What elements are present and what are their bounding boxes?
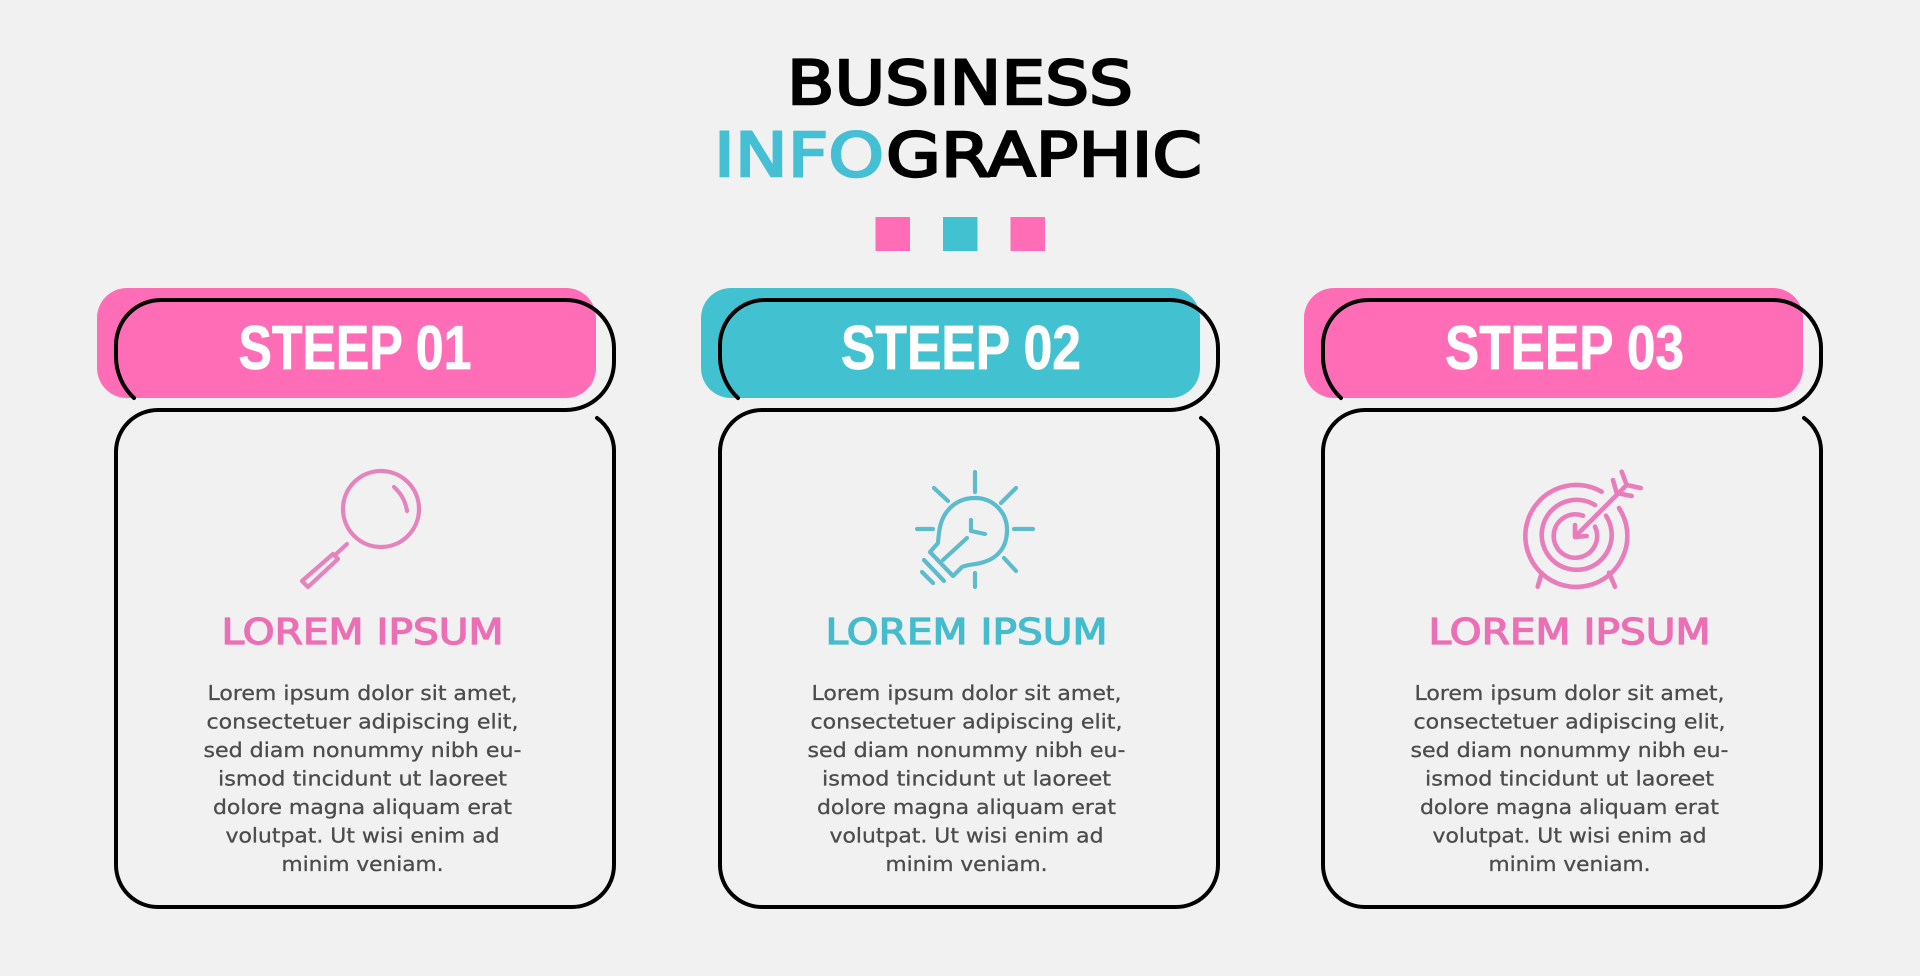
step 01 body text: sed diam nonummy nibh eu- bbox=[204, 738, 522, 762]
title: BUSINESS bbox=[787, 49, 1133, 119]
step 03 heading: LOREM IPSUM bbox=[1428, 612, 1710, 653]
step 02 heading: LOREM IPSUM bbox=[826, 612, 1108, 653]
step 02 outline bbox=[720, 300, 1218, 907]
title: INFO bbox=[714, 121, 884, 191]
step 02 body text: consectetuer adipiscing elit, bbox=[810, 710, 1122, 734]
step 01 body text: Lorem ipsum dolor sit amet, bbox=[208, 681, 518, 705]
step 01 body text bbox=[204, 681, 522, 876]
step 02 body text: volutpat. Ut wisi enim ad bbox=[830, 824, 1104, 848]
step 01 header bar bbox=[97, 288, 596, 398]
step 02 body text bbox=[808, 681, 1126, 876]
panel: step 02 bbox=[701, 288, 1218, 907]
step 03 body text: volutpat. Ut wisi enim ad bbox=[1432, 824, 1706, 848]
panel: step 01 bbox=[97, 288, 614, 907]
step 02 body text: dolore magna aliquam erat bbox=[817, 795, 1116, 819]
decorative squares bbox=[876, 217, 1045, 251]
step 03 body text: Lorem ipsum dolor sit amet, bbox=[1414, 681, 1724, 705]
step 01 body text: minim veniam. bbox=[282, 852, 444, 876]
step 03 body text: consectetuer adipiscing elit, bbox=[1414, 710, 1726, 734]
step 03 body text: ismod tincidunt ut laoreet bbox=[1425, 766, 1714, 790]
step 01 body text: consectetuer adipiscing elit, bbox=[206, 710, 518, 734]
panel: step 03 bbox=[1304, 288, 1821, 907]
title bbox=[714, 49, 1202, 191]
step 02 body text: ismod tincidunt ut laoreet bbox=[822, 766, 1111, 790]
step 03 header bar bbox=[1304, 288, 1803, 398]
icon: magnifying glass bbox=[302, 471, 419, 587]
step 01 heading: LOREM IPSUM bbox=[222, 612, 504, 653]
step 02 label: STEEP 02 bbox=[841, 314, 1081, 383]
step 01 body text: volutpat. Ut wisi enim ad bbox=[226, 824, 500, 848]
step 02 body text: Lorem ipsum dolor sit amet, bbox=[812, 681, 1122, 705]
step 01 outline bbox=[116, 300, 614, 907]
step 01 label: STEEP 01 bbox=[238, 314, 472, 383]
step 02 body text: sed diam nonummy nibh eu- bbox=[808, 738, 1126, 762]
step 03 body text bbox=[1410, 681, 1728, 876]
title: GRAPHIC bbox=[886, 121, 1202, 191]
step 03 label: STEEP 03 bbox=[1445, 314, 1684, 383]
icon: target with arrow bbox=[1525, 472, 1641, 587]
step 01 body text: dolore magna aliquam erat bbox=[213, 795, 512, 819]
step 03 body text: dolore magna aliquam erat bbox=[1420, 795, 1719, 819]
icon: light bulb with clock bbox=[917, 472, 1033, 587]
step 03 body text: minim veniam. bbox=[1488, 852, 1650, 876]
step 01 body text: ismod tincidunt ut laoreet bbox=[218, 766, 507, 790]
step 03 body text: sed diam nonummy nibh eu- bbox=[1410, 738, 1728, 762]
step 03 outline bbox=[1323, 300, 1821, 907]
step 02 body text: minim veniam. bbox=[886, 852, 1048, 876]
step 02 header bar bbox=[701, 288, 1200, 398]
